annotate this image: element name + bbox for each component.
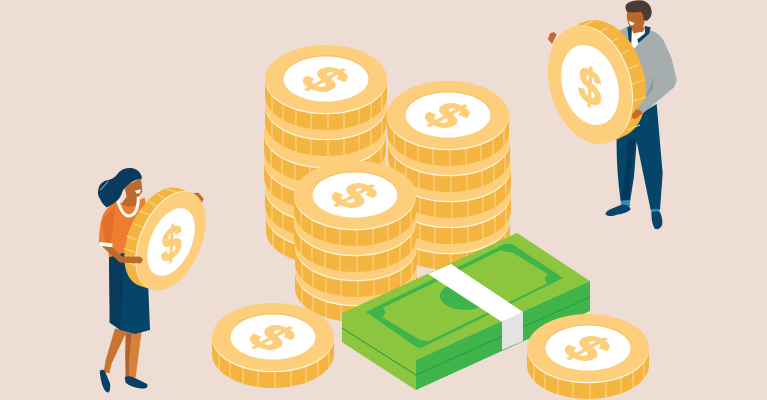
- bottom left coin: [212, 303, 334, 388]
- woman's coin: $: [160, 213, 183, 275]
- top coin face with dollar sign: $: [315, 175, 392, 217]
- front coin stack: [294, 161, 417, 322]
- bottom right coin: [527, 314, 649, 399]
- man's coin: [534, 9, 660, 155]
- man holding coin: [534, 0, 677, 229]
- right coin stack: [387, 81, 511, 270]
- man's coin: $: [577, 54, 603, 119]
- left coin stack: [264, 45, 388, 265]
- bottom right coin: $: [548, 328, 625, 370]
- woman's arm and hand: [102, 246, 143, 263]
- top coin face with dollar sign: $: [286, 59, 363, 101]
- man's arm and hand over coin: [632, 71, 677, 119]
- woman's coin: [110, 177, 220, 301]
- bottom left coin: $: [233, 317, 310, 359]
- top coin face with dollar sign: $: [408, 95, 485, 137]
- man body: [548, 0, 677, 229]
- stack of banknotes: [342, 233, 590, 390]
- banknote printed frame: [366, 244, 563, 348]
- woman body: [98, 168, 204, 393]
- illustration: [98, 0, 677, 399]
- paper band: [428, 264, 523, 350]
- woman holding coin: [98, 168, 220, 393]
